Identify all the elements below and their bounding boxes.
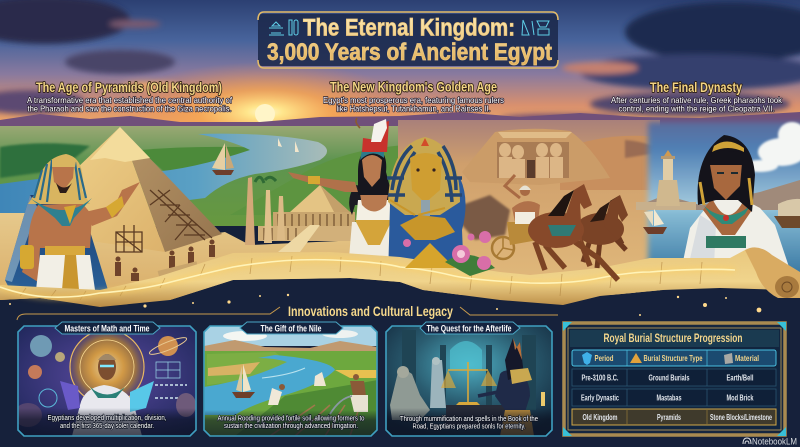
table title: Royal Burial Structure Progression bbox=[604, 331, 742, 345]
row pre-3100: Earth/Bell bbox=[726, 374, 754, 382]
era text: final dynasty: The Final Dynasty bbox=[650, 80, 742, 95]
row old kingdom: Pyramids bbox=[657, 413, 681, 422]
corner gems bbox=[563, 322, 786, 436]
chariot and horses bbox=[492, 175, 628, 280]
table header row bbox=[572, 350, 776, 366]
sky and harbour on the right bbox=[640, 122, 800, 283]
caption: Egyptians developed multiplication, division, bbox=[48, 413, 166, 422]
section heading: innovations: Innovations and Cultural Legacy bbox=[288, 303, 453, 319]
abu simbel rock temple bbox=[462, 129, 610, 185]
lotus flowers and treasure bbox=[403, 231, 495, 276]
era text: new kingdom: Egypt's most prosperous era, featuring famous rulers bbox=[323, 96, 504, 105]
era text: old kingdom bbox=[27, 80, 233, 114]
tab title: The Gift of the Nile bbox=[260, 324, 322, 334]
row early dynastic bbox=[572, 389, 776, 406]
panel: the gift of the nile bbox=[204, 322, 378, 436]
era text: final dynasty bbox=[611, 80, 783, 114]
caption: and the first 365-day soler calendar. bbox=[60, 421, 154, 430]
panel: the quest for the afterlife bbox=[386, 322, 553, 436]
sandy foreground, left bbox=[0, 213, 400, 300]
row early dynastic: Early Dynastic bbox=[581, 394, 619, 402]
era text: new kingdom: The New Kingdom's Golden Age bbox=[330, 80, 497, 94]
section heading: innovations bbox=[17, 303, 558, 320]
hieroglyph icons bbox=[269, 20, 549, 35]
golden timeline line bbox=[0, 260, 735, 297]
timeline field: dark lower area bbox=[0, 278, 800, 447]
era text: final dynasty: After centuries of native rule, Greek pharaohs took bbox=[611, 96, 783, 105]
scroll roll end bbox=[745, 247, 800, 298]
row pre-3100 bbox=[572, 369, 776, 386]
tab title bbox=[55, 322, 160, 334]
workers at the pyramid base bbox=[115, 240, 215, 281]
caption: Road, Egyptians prepared sonls for eternity. bbox=[412, 422, 526, 430]
lighthouse of alexandria bbox=[636, 150, 696, 210]
era text: final dynasty: control, ending with the reige of Cleopatra VII. bbox=[618, 104, 774, 114]
queen cleopatra bbox=[678, 135, 795, 285]
era text: new kingdom: like Hatshepsut, Tutankhamun, and Rainses II. bbox=[336, 104, 490, 114]
era text: old kingdom: the Pharaoh and saw the construction of the Giza necropolis. bbox=[28, 104, 232, 114]
title banner bbox=[258, 12, 558, 68]
stars over lower field bbox=[9, 294, 761, 316]
sailing ships bbox=[212, 138, 800, 234]
tab title: Masters of Math and Time bbox=[64, 324, 150, 334]
caption: Annual Rooding provided fortile soil, allowing formers to bbox=[218, 414, 364, 422]
row old kingdom: Old Kingdom bbox=[582, 413, 618, 422]
caption: sustain the civilization through advanced Iirrigation. bbox=[224, 421, 358, 430]
tab title bbox=[240, 322, 343, 334]
table header row: Material bbox=[735, 353, 759, 363]
green valley landscape bbox=[0, 126, 405, 226]
river nile bbox=[0, 134, 327, 214]
desert with dunes bbox=[398, 120, 665, 295]
caption: Through mummification and spells in the Book of the bbox=[400, 414, 538, 423]
era text: new kingdom bbox=[323, 80, 504, 114]
row early dynastic: Mod Brick bbox=[726, 394, 754, 402]
era text: old kingdom: The Age of Pyramids (Old Kingdom) bbox=[36, 80, 222, 95]
era text: old kingdom: A transformative era that established the central authority of bbox=[27, 96, 233, 105]
table header row: Burial Structure Type bbox=[644, 353, 703, 363]
table header row: Period bbox=[594, 353, 614, 363]
row old kingdom bbox=[572, 409, 776, 425]
timeline scroll bbox=[0, 250, 790, 307]
title text: 3,000 Years of Ancient Egypt bbox=[267, 39, 552, 66]
title text: The Eternal Kingdom: bbox=[303, 14, 515, 42]
tutankhamun golden mask bbox=[387, 137, 466, 278]
table panel: royal burial structure progression bbox=[562, 321, 787, 437]
row early dynastic: Mastabas bbox=[656, 394, 682, 402]
mortuary temple and obelisks bbox=[245, 177, 355, 252]
row pre-3100: Ground Burials bbox=[648, 374, 690, 382]
queen hatshepsut pointing bbox=[288, 118, 400, 270]
tab title: The Quest for the Afterlife bbox=[426, 324, 512, 334]
tab title bbox=[420, 322, 520, 334]
great pyramid bbox=[50, 127, 222, 252]
header icons bbox=[582, 352, 733, 365]
army behind chariot bbox=[462, 195, 510, 240]
row pre-3100: Pre-3100 B.C. bbox=[582, 374, 618, 382]
panel: masters of math and time bbox=[14, 322, 196, 436]
background: sky bbox=[0, 0, 800, 162]
scaffolding bbox=[116, 190, 212, 252]
horizon mountains bbox=[0, 112, 800, 135]
pharaoh of the old kingdom bbox=[5, 154, 140, 290]
